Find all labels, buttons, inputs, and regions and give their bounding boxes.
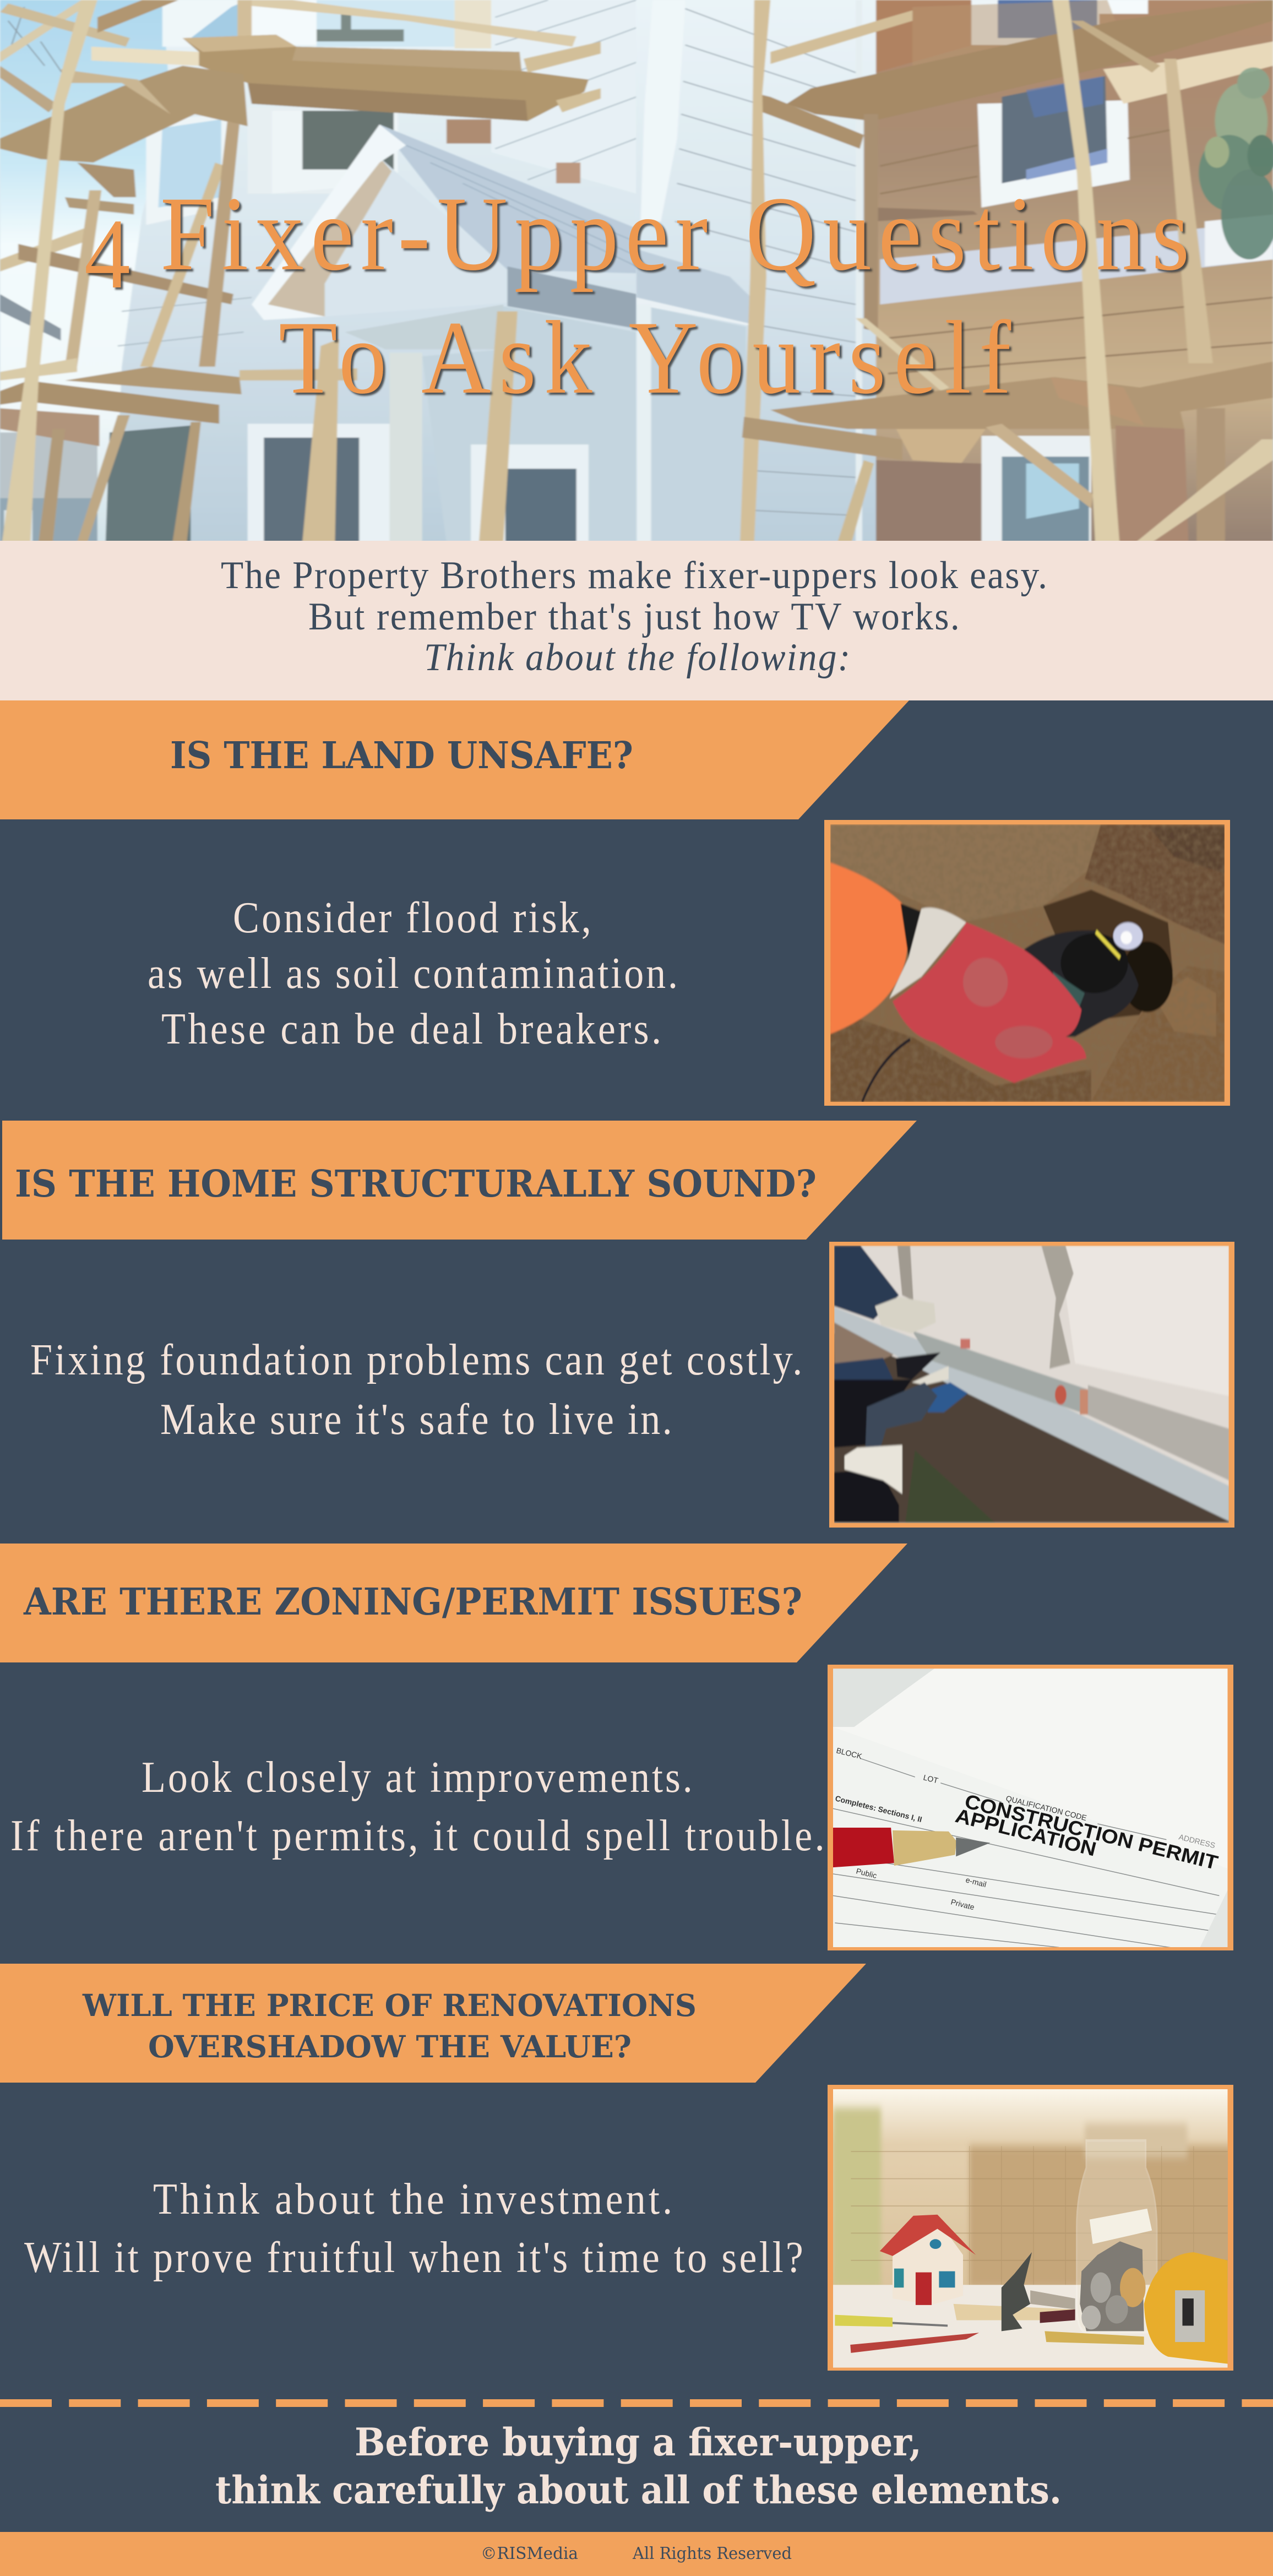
body text 4 [24,2175,803,2282]
heading banner 1: IS THE LAND UNSAFE? [170,733,633,777]
dashed divider [0,2399,1273,2407]
body text 1: These can be deal breakers. [161,1005,661,1053]
closing statement [215,2420,1062,2513]
hero photo: house under scaffolding [0,0,1273,542]
body text 1 [148,894,678,1053]
body text 1: as well as soil contamination. [148,949,678,998]
intro text: Think about the following: [424,635,850,678]
closing statement: think carefully about all of these elements. [215,2468,1062,2513]
footer bar [0,2532,1273,2576]
photo: model house, tools and coin jar [828,2085,1233,2371]
photo: model house, tools and coin jar: Home [1100,1786,1139,1807]
section 3: permits [0,1544,1233,1950]
body text 3: Look closely at improvements. [142,1753,693,1802]
heading banner 2 [2,1121,917,1240]
photo right half: siding, wood wall, window, tree and scaffolding [636,0,1273,542]
body text 2 [30,1336,802,1444]
intro text [221,553,1047,678]
copyright line: All Rights Reserved [632,2544,792,2563]
heading banner 4: OVERSHADOW THE VALUE? [148,2029,632,2064]
body text 2: Fixing foundation problems can get costly. [30,1336,802,1384]
photo: construction permit application and pen: QUALIFICATION CODE [1005,1794,1087,1822]
body text 3: If there aren't permits, it could spell trouble. [10,1812,825,1860]
closing statement: Before buying a fixer-upper, [355,2420,922,2465]
photo: construction permit application and pen: Completes: Sections I, II [834,1794,923,1824]
photo: construction permit application and pen: ADDRESS [1178,1832,1216,1850]
title: 4 [84,198,130,309]
photo: construction permit application and pen: LOT [922,1773,939,1785]
body text 1: Consider flood risk, [233,894,591,942]
body text 3 [10,1753,825,1860]
heading banner 2: IS THE HOME STRUCTURALLY SOUND? [15,1162,817,1205]
section 2: structure [2,1121,1234,1528]
copyright line: ©RISMedia [481,2544,578,2563]
heading banner 4: WILL THE PRICE OF RENOVATIONS [82,1987,697,2023]
heading banner 3: ARE THERE ZONING/PERMIT ISSUES? [23,1580,802,1623]
photo: construction permit application and pen: CONSTRUCTION PERMIT [962,1790,1220,1874]
photo: gloved hand testing soil [824,820,1230,1106]
intro text: But remember that's just how TV works. [308,594,960,638]
pale wash over photo [0,0,1273,541]
photo: construction permit application and pen: e-mail [965,1875,987,1889]
photo: construction permit application and pen: APPLICATION [953,1804,1098,1861]
body text 2: Make sure it's safe to live in. [160,1395,672,1444]
heading banner 4 [0,1964,866,2083]
title [84,175,1189,416]
section 4: renovation cost [0,1964,1233,2371]
copyright line [481,2544,792,2563]
photo: construction permit application and pen: BLOCK [835,1746,863,1761]
intro panel [0,541,1273,700]
body text 4: Think about the investment. [153,2175,672,2224]
heading banner 1 [0,700,909,819]
photo: construction permit application and pen [828,1665,1233,1950]
photo left half: sky, siding, dormer and scaffolding [0,0,636,542]
section 1: land [0,700,1230,1106]
title: To Ask Yourself [279,300,1011,416]
heading banner 3 [0,1544,907,1662]
photo: level against foundation wall [829,1242,1234,1528]
title: Fixer-Upper Questions [160,175,1189,293]
body text 4: Will it prove fruitful when it's time to sell? [24,2233,803,2282]
intro text: The Property Brothers make fixer-uppers look easy. [221,553,1047,596]
photo: construction permit application and pen: Public [855,1866,878,1880]
photo: construction permit application and pen: Private [950,1897,976,1912]
